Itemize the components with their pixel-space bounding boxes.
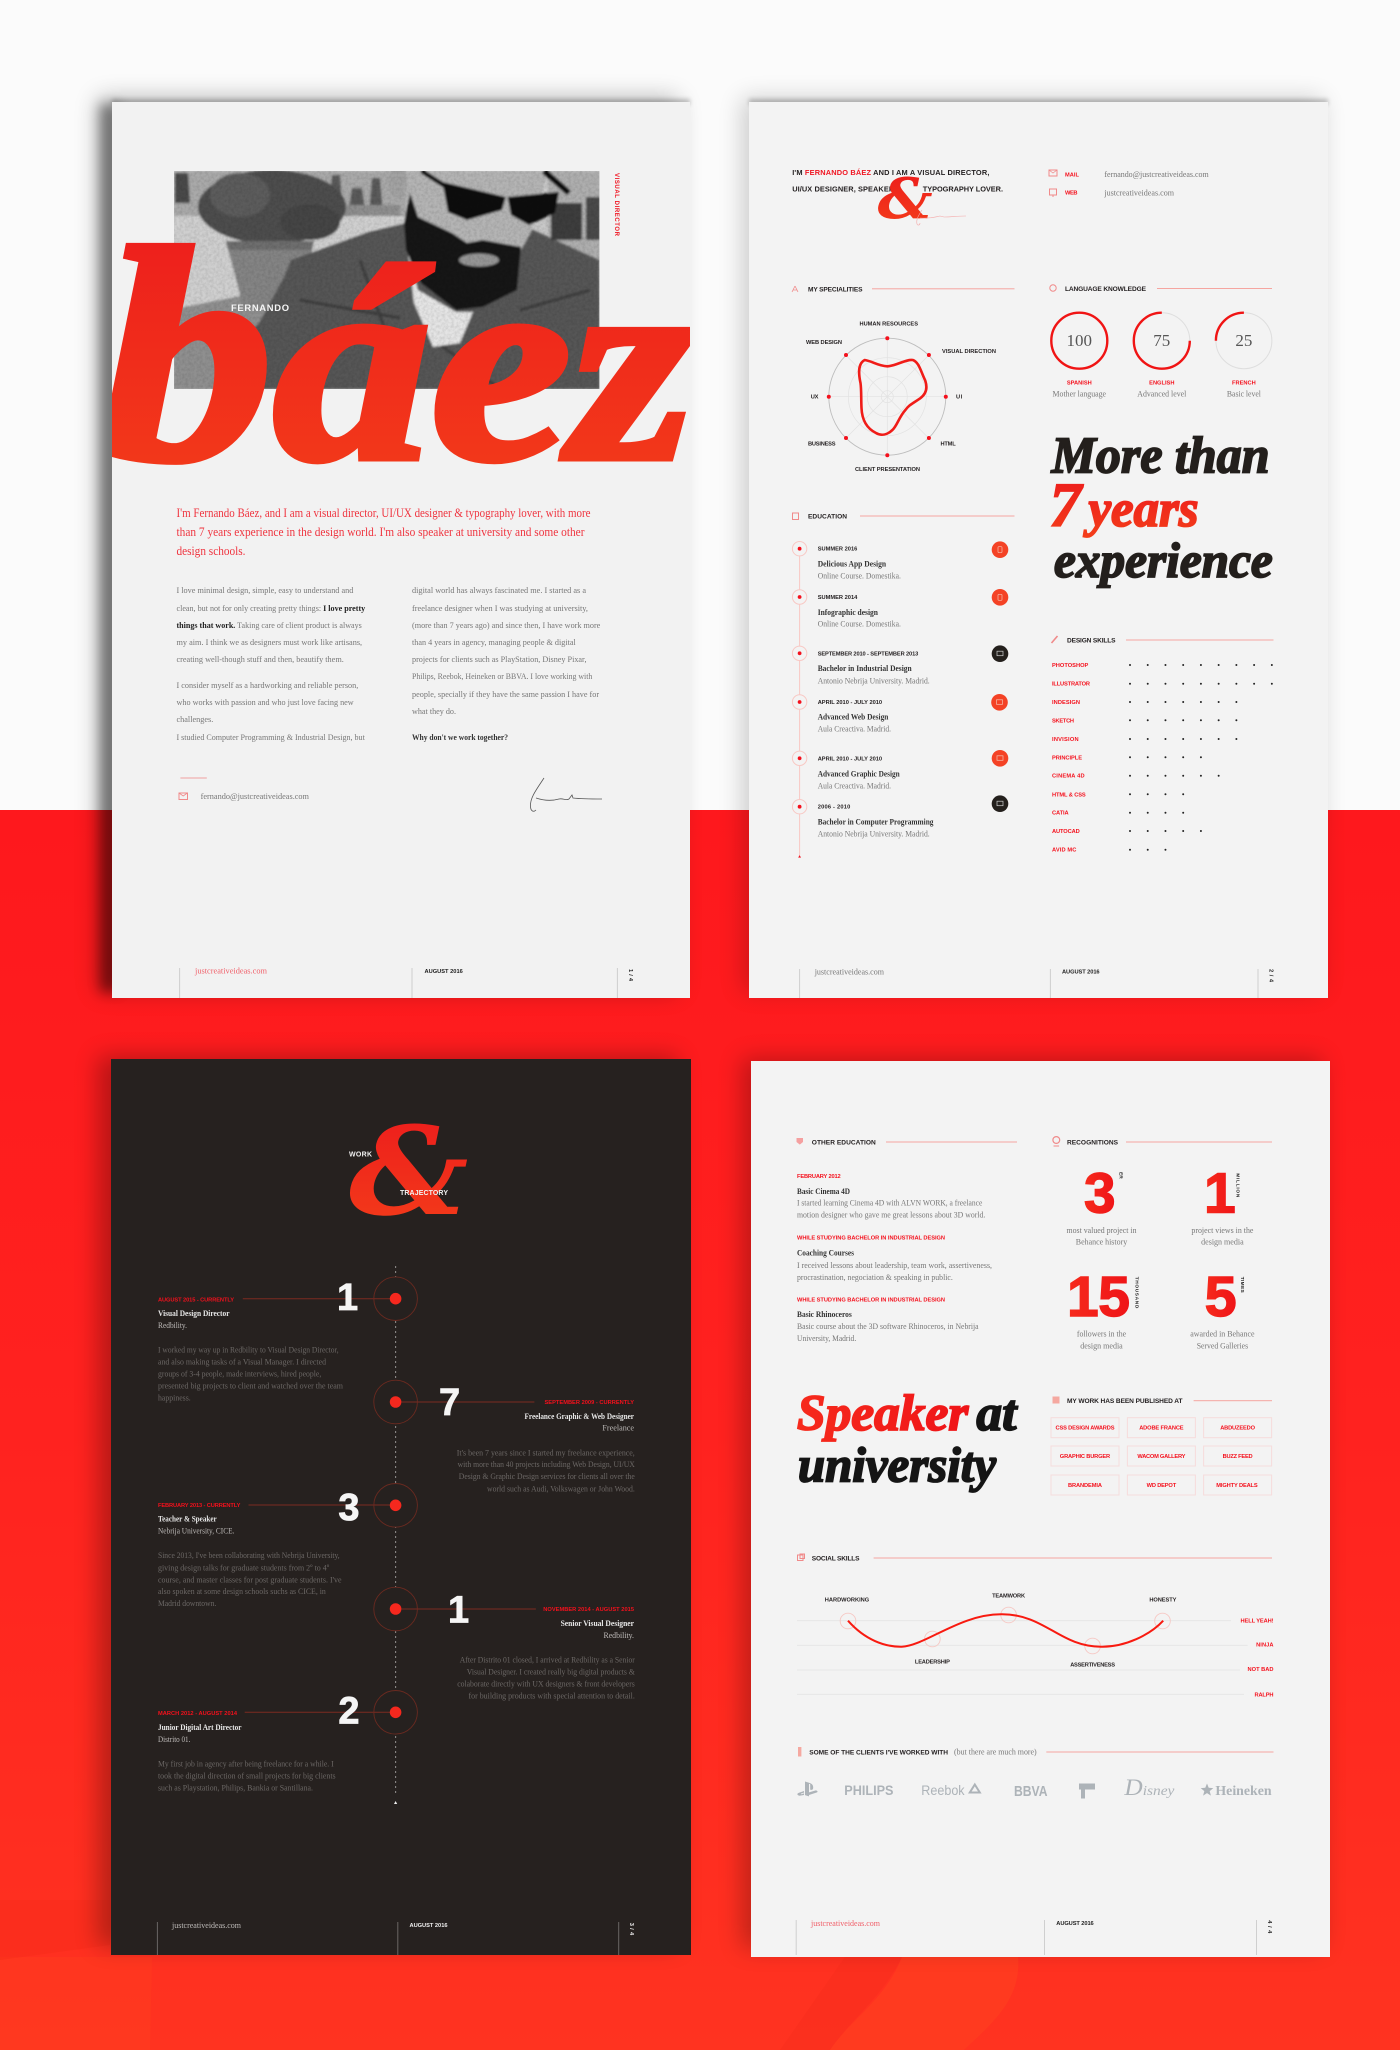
- contact: mail and web: WEB: [1065, 190, 1078, 196]
- footer page 2: justcreativeideas.com: [814, 966, 884, 976]
- footer page 3: 3 / 4: [628, 1923, 634, 1936]
- other education list: motion designer who gave me great lessons about 3D world.: [797, 1210, 985, 1220]
- entry 1: visual design director: Visual Design Director: [158, 1308, 230, 1318]
- body text: right column: projects for clients such as PlayStation, Disney Pixar,: [412, 654, 586, 664]
- design skills dot rows: INDESIGN: [1052, 700, 1080, 706]
- entry 1: visual design director: presented big projects to client and watched over the team: [158, 1381, 343, 1391]
- section heading: published at: MY WORK HAS BEEN PUBLISHED AT: [1067, 1398, 1182, 1405]
- signature: [530, 778, 602, 811]
- entry 5: junior digital art director: took the digital direction of small projects for big clients: [158, 1770, 336, 1780]
- label: Fernando: FERNANDO: [231, 302, 289, 313]
- section heading: other education: [796, 1138, 1017, 1146]
- entry: bachelor industrial design: Antonio Nebrija University. Madrid.: [818, 675, 930, 685]
- entry 3: teacher and speaker: Teacher & Speaker: [158, 1514, 217, 1524]
- publication badges: CSS DESIGN AWARDS: [1056, 1426, 1115, 1432]
- education timeline: [792, 541, 1274, 998]
- intro paragraph: I'm Fernando Báez, and I am a visual director, UI/UX designer & typography lover, with more: [176, 506, 590, 520]
- social skills line chart: TEAMWORK: [992, 1593, 1026, 1599]
- entry 4: senior visual designer: After Distrito 01 closed, I arrived at Redbility as a Senior: [460, 1654, 635, 1664]
- entry 2: freelance designer: Freelance: [602, 1422, 634, 1432]
- social skills line chart: ASSERTIVENESS: [1070, 1662, 1115, 1668]
- entry: summer 2014: SUMMER 2014: [818, 595, 858, 601]
- entry 2: freelance designer: Freelance Graphic & Web Designer: [524, 1411, 634, 1421]
- body text: left column: creating well-though stuff and then, beautify them.: [176, 654, 344, 664]
- section heading: social skills: SOCIAL SKILLS: [812, 1556, 860, 1562]
- entry 4: senior visual designer: colaborate directly with UX designers & front developers: [457, 1679, 635, 1689]
- ampersand emblem: &: [349, 1099, 468, 1243]
- entry 2: freelance designer: world such as Audi, Volkswagen or John Wood.: [487, 1483, 635, 1493]
- stat: 5: 5: [1205, 1265, 1237, 1329]
- stat: 15: design media: [1080, 1340, 1123, 1350]
- entry 5: junior digital art director: [158, 1690, 360, 1792]
- entry 4: senior visual designer: [448, 1589, 635, 1701]
- logo: Disney: Disney: [1123, 1775, 1175, 1800]
- entry: bachelor industrial design: SEPTEMBER 2010 - SEPTEMBER 2013: [818, 651, 918, 657]
- social skills line chart: HONESTY: [1149, 1598, 1177, 1604]
- stat: 5: Served Galleries: [1197, 1340, 1249, 1350]
- other education list: Basic Rhinoceros: [797, 1309, 852, 1319]
- language rings: 25: [1235, 331, 1252, 350]
- footer page 2: 2 / 4: [1268, 969, 1274, 983]
- stat: 1: project views in the: [1191, 1225, 1253, 1235]
- section heading: education: EDUCATION: [808, 514, 847, 520]
- entry: bachelor computer programming: [818, 805, 934, 838]
- language rings: 75: [1153, 331, 1170, 350]
- entry 1: visual design director: I worked my way up in Redbility to Visual Design Director,: [158, 1345, 339, 1355]
- footer page 1: 1 / 4: [627, 969, 633, 982]
- social skills line chart: NOT BAD: [1248, 1667, 1274, 1673]
- stat: 3: [1066, 1161, 1137, 1246]
- entry: advanced graphic design: APRIL 2010 - JULY 2010: [818, 756, 882, 762]
- other education list: I received lessons about leadership, team work, assertiveness,: [797, 1260, 992, 1270]
- headline: more than 7 years experience: More than: [1051, 428, 1270, 485]
- headline: more than 7 years experience: 7: [1050, 472, 1084, 540]
- stat: 5: TIMES: [1239, 1277, 1245, 1293]
- publication badges: WACOM GALLERY: [1137, 1454, 1186, 1460]
- entry 3: teacher and speaker: [158, 1487, 360, 1608]
- language rings: [1051, 313, 1272, 398]
- entry 3: teacher and speaker: Since 2013, I've been collaborating with Nebrija University,: [158, 1550, 340, 1560]
- logo: Reebok: Reebok: [921, 1782, 965, 1798]
- entry: summer 2014: Infographic design: [818, 607, 878, 617]
- contact: email: [179, 778, 309, 801]
- social skills line chart: NINJA: [1256, 1643, 1274, 1649]
- stat: 15: [1067, 1265, 1140, 1350]
- entry: advanced web design: APRIL 2010 - JULY 2010: [818, 700, 882, 706]
- radar chart: UI: [956, 395, 963, 401]
- footer page 3: justcreativeideas.com: [171, 1920, 241, 1930]
- language rings: Mother language: [1053, 388, 1106, 398]
- entry 5: junior digital art director: 2: [338, 1690, 360, 1732]
- body text: left column: challenges.: [176, 714, 213, 724]
- entry 1: visual design director: and also making tasks of a Visual Manager. I directed: [158, 1357, 327, 1367]
- logo: Fox-style mark: [1079, 1784, 1095, 1798]
- body text: right column: [412, 585, 600, 742]
- social skills line chart: RALPH: [1254, 1692, 1274, 1698]
- section heading: clients: SOME OF THE CLIENTS I'VE WORKED WITH: [809, 1750, 948, 1756]
- radar chart: [806, 322, 996, 473]
- publication badges: BUZZ FEED: [1223, 1454, 1253, 1460]
- section heading: language knowledge: [1050, 285, 1272, 293]
- footer page 4: [796, 1918, 1272, 1955]
- stat: 15: 15: [1067, 1265, 1130, 1329]
- other education list: I started learning Cinema 4D with ALVN WORK, a freelance: [797, 1198, 982, 1208]
- section heading: published at: [1052, 1396, 1272, 1405]
- entry: summer 2016: SUMMER 2016: [818, 546, 857, 552]
- publication badges: [1051, 1418, 1272, 1495]
- entry 1: visual design director: 1: [337, 1277, 358, 1319]
- other education list: WHILE STUDYING BACHELOR IN INDUSTRIAL DESIGN: [797, 1297, 945, 1303]
- body text: right column: what they do.: [412, 706, 456, 716]
- other education list: WHILE STUDYING BACHELOR IN INDUSTRIAL DESIGN: [797, 1236, 945, 1242]
- entry 2: freelance designer: [439, 1382, 636, 1493]
- page shadows: [98, 98, 1328, 1948]
- radar chart: VISUAL DIRECTION: [942, 349, 996, 355]
- language rings: ENGLISH: [1149, 380, 1174, 386]
- body text: left column: things that work. Taking care of client product is always: [176, 620, 362, 630]
- footer page 4: 4 / 4: [1266, 1920, 1272, 1934]
- entry 5: junior digital art director: MARCH 2012 - AUGUST 2014: [158, 1711, 238, 1717]
- entry 2: freelance designer: It's been 7 years since I started my freelance experience,: [457, 1447, 635, 1457]
- publication badges: ADOBE FRANCE: [1139, 1426, 1184, 1432]
- publication badges: BRANDEMIA: [1068, 1483, 1102, 1489]
- social skills line chart: [797, 1593, 1274, 1698]
- radar chart: CLIENT PRESENTATION: [855, 467, 920, 473]
- stat: 3: most valued project in: [1066, 1225, 1137, 1235]
- entry: bachelor industrial design: [818, 651, 930, 685]
- headline: speaker at university: [797, 1386, 1018, 1493]
- headline: more than 7 years experience: years: [1083, 481, 1198, 538]
- radar chart: WEB DESIGN: [806, 340, 842, 346]
- section heading: recognitions: [1053, 1137, 1272, 1146]
- headline: more than 7 years experience: experience: [1054, 532, 1273, 588]
- body text: right column: Philips, Reebok, Heineken or BBVA. I love working with: [412, 671, 593, 681]
- language rings: Advanced level: [1137, 388, 1187, 398]
- headline: speaker at university: at: [976, 1386, 1018, 1442]
- footer page 4: AUGUST 2016: [1056, 1921, 1094, 1927]
- headline: speaker at university: Speaker: [797, 1386, 969, 1442]
- section heading: language knowledge: LANGUAGE KNOWLEDGE: [1065, 286, 1147, 293]
- body text: right column: freelance designer when I was studying at university,: [412, 603, 588, 613]
- footer page 1: [180, 966, 633, 998]
- ampersand with signature: [878, 166, 966, 232]
- entry 4: senior visual designer: NOVEMBER 2014 - AUGUST 2015: [543, 1607, 634, 1613]
- stat: 1: MILLION: [1235, 1173, 1241, 1198]
- intro paragraph: design schools.: [176, 544, 246, 558]
- entry 3: teacher and speaker: also spoken at some design schools suchs as CICE, in: [158, 1586, 326, 1596]
- background: red lower band: [0, 810, 1400, 2050]
- entry 1: visual design director: groups of 3-4 people, made interviews, hired people,: [158, 1369, 321, 1379]
- design skills dot rows: ILLUSTRATOR: [1052, 682, 1090, 688]
- stat: 15: THOUSAND: [1134, 1277, 1140, 1309]
- contact: email: fernando@justcreativeideas.com: [201, 791, 309, 801]
- intro heading: [792, 168, 1003, 194]
- timeline axis: [394, 1266, 397, 1804]
- entry 5: junior digital art director: Distrito 01.: [158, 1734, 190, 1744]
- entry 2: freelance designer: 7: [439, 1382, 460, 1424]
- entry 2: freelance designer: with more than 40 projects including Web Design, UI/UX: [458, 1459, 636, 1469]
- entry: summer 2014: [818, 595, 901, 629]
- entry: bachelor industrial design: Bachelor in Industrial Design: [818, 663, 912, 673]
- entry 4: senior visual designer: Redbility.: [604, 1630, 634, 1640]
- entry 5: junior digital art director: Junior Digital Art Director: [158, 1722, 242, 1732]
- radar chart: HUMAN RESOURCES: [860, 322, 918, 328]
- entry 5: junior digital art director: such as Playstation, Philips, Bankia or Santillana.: [158, 1782, 313, 1792]
- publication badges: MIGHTY DEALS: [1216, 1483, 1258, 1489]
- body text: left column: clean, but not for only creating pretty things: I love pretty: [176, 603, 366, 613]
- headline: more than 7 years experience: [1050, 428, 1273, 588]
- entry: advanced graphic design: Advanced Graphic Design: [818, 768, 900, 778]
- entry: summer 2016: [818, 546, 901, 580]
- stat: 3: 3: [1084, 1161, 1116, 1225]
- design skills dot rows: CINEMA 4D: [1052, 774, 1085, 780]
- body text: right column: Why don't we work together?: [412, 732, 508, 742]
- entry 1: visual design director: happiness.: [158, 1392, 191, 1402]
- language rings: Basic level: [1227, 388, 1261, 398]
- entry 4: senior visual designer: 1: [448, 1589, 469, 1631]
- stat: 5: [1190, 1265, 1255, 1350]
- footer page 1: justcreativeideas.com: [194, 966, 267, 976]
- entry 2: freelance designer: SEPTEMBER 2009 - CURRENTLY: [544, 1400, 634, 1406]
- other education list: University, Madrid.: [797, 1333, 856, 1343]
- entry 1: visual design director: AUGUST 2015 - CURRENTLY: [158, 1297, 234, 1303]
- stat: 3: Behance history: [1076, 1236, 1128, 1246]
- entry 3: teacher and speaker: Nebrija University, CICE.: [158, 1526, 234, 1536]
- logo: Heineken: Heineken: [1215, 1784, 1272, 1799]
- other education list: Basic course about the 3D software Rhinoceros, in Nebrija: [797, 1321, 979, 1331]
- recognitions stats: [1066, 1161, 1255, 1350]
- other education list: Basic Cinema 4D: [797, 1186, 850, 1196]
- panel: page 2 skills: [111, 102, 1330, 1957]
- label: visual director (rotated): VISUAL DIRECTOR: [613, 173, 619, 237]
- entry: advanced web design: Aula Creactiva. Madrid.: [818, 724, 891, 734]
- footer page 2: [800, 966, 1274, 998]
- language rings: 100: [1067, 331, 1092, 350]
- ampersand with signature: &: [878, 166, 933, 232]
- section heading: clients: [798, 1746, 1274, 1756]
- entry: summer 2016: Delicious App Design: [818, 558, 886, 568]
- social skills line chart: HELL YEAH!: [1240, 1619, 1274, 1625]
- other education list: [797, 1174, 992, 1343]
- language rings: SPANISH: [1067, 380, 1092, 386]
- body text: right column: people, specially if they have the same passion I have for: [412, 689, 599, 699]
- stat: 1: design media: [1201, 1236, 1244, 1246]
- body text: left column: I studied Computer Programming & Industrial Design, but: [176, 732, 365, 742]
- design skills dot rows: SKETCH: [1052, 718, 1074, 724]
- language rings: FRENCH: [1232, 380, 1256, 386]
- background: light upper band: [0, 0, 1400, 810]
- body text: left column: I love minimal design, simple, easy to understand and: [176, 585, 354, 595]
- entry 3: teacher and speaker: FEBRUARY 2013 - CURRENTLY: [158, 1503, 241, 1509]
- design skills dot rows: HTML & CSS: [1052, 792, 1086, 798]
- social skills line chart: LEADERSHIP: [915, 1660, 950, 1666]
- stat: 5: awarded in Behance: [1190, 1328, 1255, 1338]
- entry 3: teacher and speaker: 3: [338, 1487, 360, 1529]
- design skills dot rows: AVID MC: [1052, 848, 1076, 854]
- footer page 2: AUGUST 2016: [1062, 970, 1100, 976]
- other education list: FEBRUARY 2012: [797, 1174, 841, 1180]
- panel: page 1 intro: [100, 102, 694, 998]
- portrait photo: [174, 163, 600, 389]
- other education list: procrastination, negociation & speaking in public.: [797, 1272, 953, 1282]
- contact: mail and web: MAIL: [1065, 172, 1080, 178]
- entry 5: junior digital art director: My first job in agency after being freelance for a while. I: [158, 1759, 334, 1769]
- entry: bachelor computer programming: Antonio Nebrija University. Madrid.: [818, 828, 930, 838]
- publication badges: ABDUZEEDO: [1220, 1426, 1256, 1432]
- ampersand emblem: TRAJECTORY: [400, 1190, 448, 1197]
- intro paragraph: than 7 years experience in the design world. I'm also speaker at university and some other: [176, 525, 584, 539]
- radar chart: HTML: [940, 442, 956, 448]
- body text: left column: my aim. I think we as designers must work like artisans,: [176, 637, 362, 647]
- entry 3: teacher and speaker: course, and master classes for post graduate students. I've: [158, 1574, 342, 1584]
- footer page 3: [157, 1920, 634, 1955]
- connector lines: [243, 1299, 536, 1712]
- footer page 1: AUGUST 2016: [424, 969, 463, 975]
- ampersand emblem: WORK: [349, 1152, 372, 1158]
- design skills dot rows: [1052, 663, 1272, 854]
- education type badges: [991, 541, 1008, 812]
- entry 2: freelance designer: Design & Graphic Design services for clients all over the: [459, 1471, 635, 1481]
- contact: mail and web: [1049, 169, 1209, 198]
- logo: PlayStation: [797, 1782, 818, 1796]
- entry 3: teacher and speaker: Madrid downtown.: [158, 1598, 216, 1608]
- entry: bachelor computer programming: 2006 - 2010: [818, 805, 850, 811]
- entry: advanced web design: [818, 700, 891, 734]
- section heading: social skills: [798, 1554, 1272, 1562]
- publication badges: GRAPHIC BURGER: [1060, 1454, 1110, 1460]
- intro paragraph: [176, 506, 590, 558]
- section heading: design skills: [1052, 636, 1274, 644]
- entry 4: senior visual designer: Visual Designer. I created really big digital products &: [467, 1666, 635, 1676]
- intro heading: UI/UX DESIGNER, SPEAKER: [792, 184, 895, 194]
- client logos: [797, 1775, 1272, 1800]
- footer page 4: justcreativeideas.com: [810, 1918, 880, 1928]
- stat: 15: followers in the: [1077, 1328, 1126, 1338]
- other education list: Coaching Courses: [797, 1248, 854, 1258]
- body text: left column: I consider myself as a hardworking and reliable person,: [176, 680, 358, 690]
- body text: left column: who works with passion and who just love facing new: [176, 697, 354, 707]
- intro heading: TYPOGRAPHY LOVER.: [923, 184, 1003, 194]
- entry 3: teacher and speaker: giving design talks for graduate students from 2º to 4º: [158, 1562, 329, 1572]
- stat: 1: 1: [1204, 1161, 1236, 1225]
- design skills dot rows: CATIA: [1052, 811, 1069, 817]
- design skills dot rows: PHOTOSHOP: [1052, 663, 1089, 669]
- headline: speaker at university: university: [798, 1437, 997, 1493]
- design skills dot rows: PRINCIPLE: [1052, 755, 1082, 761]
- entry: advanced graphic design: Aula Creactiva. Madrid.: [818, 780, 891, 790]
- section heading: my specialities: [792, 286, 1014, 294]
- entry 1: visual design director: [158, 1277, 358, 1402]
- entry: bachelor computer programming: Bachelor in Computer Programming: [818, 817, 934, 827]
- body text: right column: (more than 7 years ago) and since then, I have work more: [412, 620, 600, 630]
- entry: advanced graphic design: [818, 756, 900, 790]
- social skills line chart: HARDWORKING: [825, 1598, 870, 1604]
- radar chart: UX: [811, 395, 819, 401]
- section heading: clients: (but there are much more): [954, 1746, 1037, 1756]
- entry: summer 2016: Online Course. Domestika.: [818, 570, 901, 580]
- design skills dot rows: AUTOCAD: [1052, 829, 1080, 835]
- section heading: education: [792, 513, 1014, 520]
- entry: advanced web design: Advanced Web Design: [818, 712, 888, 722]
- body text: right column: than 4 years in agency, managing people & digital: [412, 637, 576, 647]
- design skills dot rows: INVISION: [1052, 737, 1079, 743]
- entry 1: visual design director: Redbility.: [158, 1320, 187, 1330]
- stat: 1: [1191, 1161, 1253, 1246]
- entry 4: senior visual designer: for building products with special attention to detail.: [468, 1691, 635, 1701]
- section heading: my specialities: MY SPECIALITIES: [808, 286, 863, 294]
- timeline nodes: [374, 1277, 417, 1734]
- logo: Philips: PHILIPS: [844, 1783, 894, 1798]
- contact: mail and web: fernando@justcreativeideas.com: [1104, 169, 1209, 179]
- publication badges: WD DEPOT: [1147, 1483, 1177, 1489]
- title: báez: báez: [100, 186, 694, 524]
- section heading: design skills: DESIGN SKILLS: [1067, 638, 1116, 644]
- panel: page 3 work trajectory: [111, 1059, 691, 1955]
- contact: mail and web: justcreativeideas.com: [1103, 188, 1174, 198]
- logo: BBVA: BBVA: [1014, 1784, 1048, 1800]
- footer page 3: AUGUST 2016: [410, 1923, 448, 1929]
- radar chart: BUSINESS: [808, 442, 836, 448]
- panel: page 4 recognitions: [751, 1061, 1330, 1957]
- intro heading: I'M FERNANDO BÁEZ AND I AM A VISUAL DIRECTOR,: [792, 168, 989, 177]
- entry 4: senior visual designer: Senior Visual Designer: [561, 1618, 634, 1628]
- body text: left column: [176, 585, 366, 742]
- section heading: other education: OTHER EDUCATION: [812, 1140, 876, 1146]
- body text: right column: digital world has always fascinated me. I started as a: [412, 585, 586, 595]
- section heading: recognitions: RECOGNITIONS: [1067, 1140, 1119, 1146]
- stat: 3: ER: [1118, 1172, 1124, 1179]
- entry: summer 2014: Online Course. Domestika.: [818, 619, 901, 629]
